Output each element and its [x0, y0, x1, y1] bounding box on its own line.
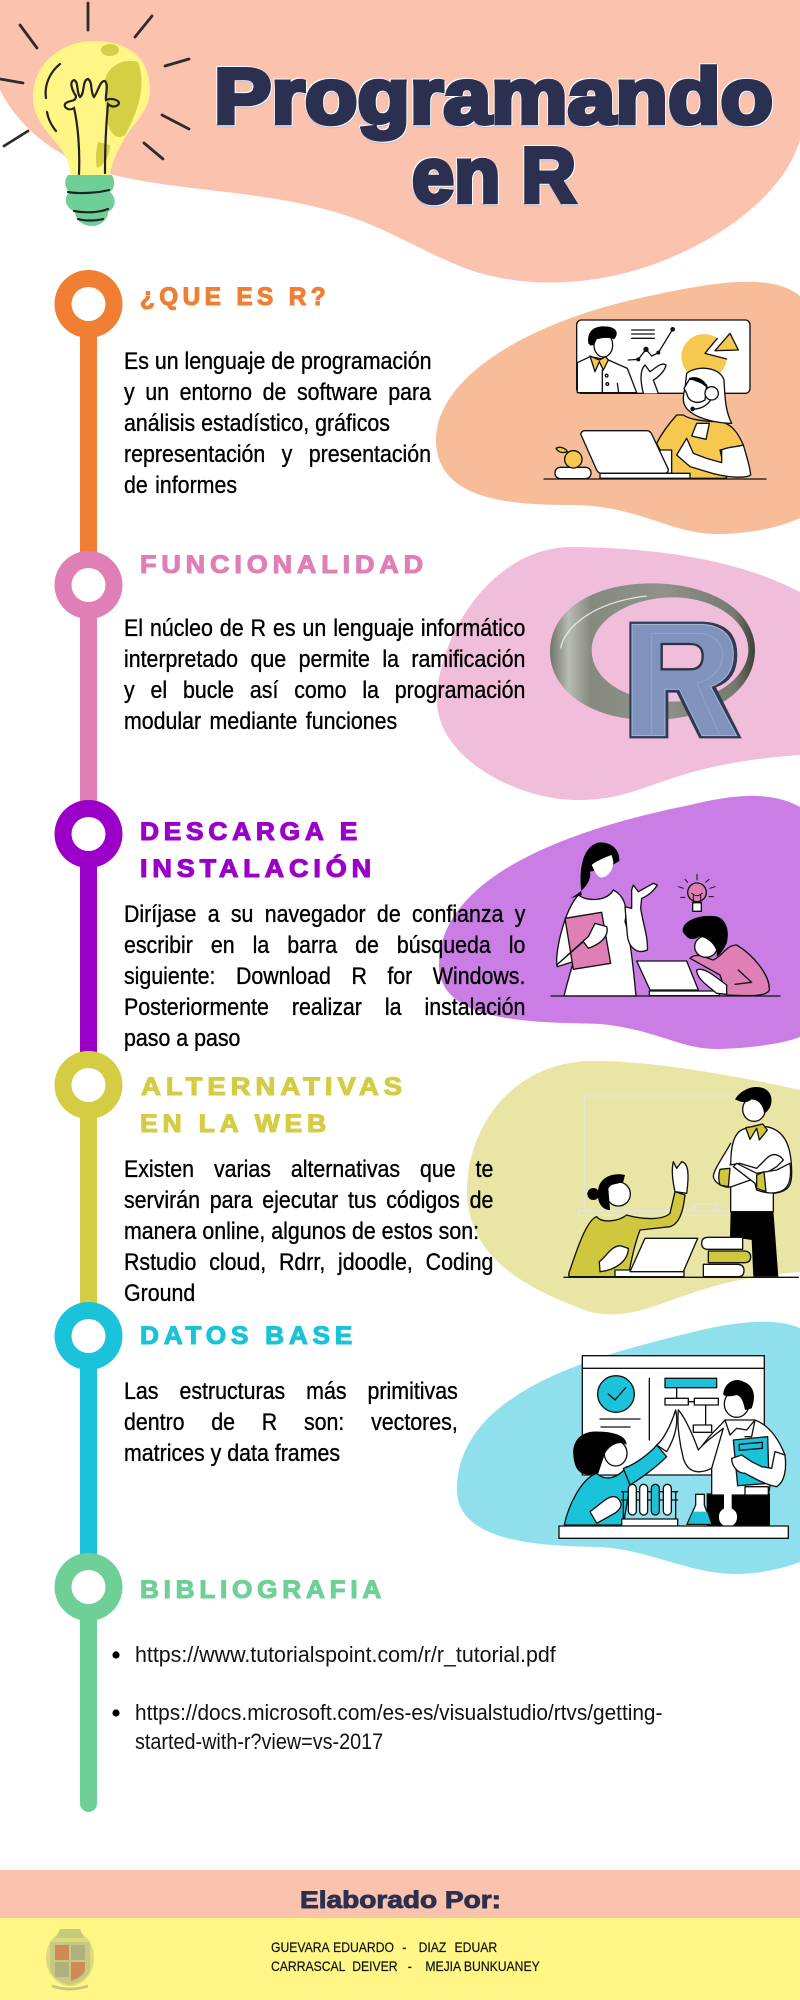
- text block: alternativas: servirán para ejecutar tus códigos de: [124, 1187, 493, 1214]
- blob: alternativas: [467, 1061, 800, 1314]
- title: Programando: [214, 52, 773, 140]
- footer heading: Elaborado Por:: [300, 1887, 501, 1914]
- heading: datos base: DATOS BASE: [140, 1322, 357, 1350]
- text block: funcionalidad: y el bucle así como la programación: [124, 677, 525, 704]
- bibliography links: https://www.tutorialspoint.com/r/r_tutorial.pdf: [135, 1642, 556, 1667]
- header blob: [0, 0, 800, 282]
- text block: descarga: Posteriormente realizar la instalación: [124, 994, 525, 1021]
- footer band: [0, 1870, 800, 2000]
- illustration: teacher and student: [551, 842, 780, 996]
- text block: descarga: escribir en la barra de búsqueda lo: [124, 932, 525, 959]
- text block: que es R: [124, 348, 432, 499]
- icon: university crest: [46, 1929, 94, 1989]
- heading: descarga e instalacion: [140, 818, 376, 883]
- text block: funcionalidad: [124, 615, 525, 735]
- footer names: CARRASCAL DEIVER - MEJIA BUNKUANEY: [271, 1958, 540, 1974]
- heading: alternativas en la web: EN LA WEB: [140, 1110, 331, 1138]
- illustration: classroom: [564, 1087, 798, 1277]
- blob: que es R: [436, 282, 800, 534]
- text block: funcionalidad: modular mediante funciones: [124, 708, 397, 735]
- illustration: video call: [544, 320, 766, 479]
- text block: funcionalidad: El núcleo de R es un lenguaje informático: [124, 615, 525, 642]
- text block: datos base: Las estructuras más primitivas: [124, 1378, 457, 1405]
- footer names: [271, 1939, 540, 1974]
- heading: descarga e instalacion: INSTALACIÓN: [140, 853, 376, 883]
- footer names: GUEVARA EDUARDO - DIAZ EDUAR: [271, 1939, 497, 1955]
- timeline: [54, 270, 122, 1812]
- title: [214, 52, 773, 219]
- bullets: [112, 1651, 120, 1717]
- blob: funcionalidad: [437, 547, 800, 800]
- heading: descarga e instalacion: DESCARGA E: [140, 818, 362, 846]
- heading: bibliografia: BIBLIOGRAFIA: [140, 1576, 386, 1604]
- text block: datos base: [124, 1378, 458, 1467]
- bibliography links: https://docs.microsoft.com/es-es/visualstudio/rtvs/getting-: [135, 1700, 662, 1725]
- text block: alternativas: Existen varias alternativas que te: [124, 1156, 493, 1183]
- text block: datos base: dentro de R son: vectores,: [124, 1409, 457, 1436]
- text block: que es R: Es un lenguaje de programación: [124, 348, 431, 375]
- title: en R: [412, 131, 576, 219]
- blob: datos base: [457, 1322, 800, 1574]
- icon: light bulb: [0, 3, 189, 226]
- text block: que es R: y un entorno de software para: [124, 379, 431, 406]
- blob: descarga: [439, 796, 800, 1049]
- heading: alternativas en la web: ALTERNATIVAS: [141, 1073, 407, 1101]
- heading: alternativas en la web: [140, 1073, 407, 1138]
- text block: alternativas: Ground: [124, 1280, 195, 1307]
- illustration: science lab: [559, 1356, 788, 1538]
- text block: descarga: siguiente: Download R for Windows.: [124, 963, 525, 990]
- bibliography links: started-with-r?view=vs-2017: [135, 1729, 383, 1754]
- text block: funcionalidad: interpretado que permite la ramificación: [124, 646, 525, 673]
- text block: alternativas: Rstudio cloud, Rdrr, jdoodle, Coding: [124, 1249, 493, 1276]
- text block: alternativas: manera online, algunos de estos son:: [124, 1218, 479, 1245]
- text block: descarga: paso a paso: [124, 1025, 240, 1052]
- illustration: R logo: [550, 583, 755, 738]
- heading: que es R: ¿QUE ES R?: [140, 283, 330, 311]
- heading: funcionalidad: FUNCIONALIDAD: [140, 551, 428, 579]
- text block: que es R: de informes: [124, 472, 237, 499]
- text block: que es R: representación y presentación: [124, 441, 431, 468]
- text block: datos base: matrices y data frames: [124, 1440, 340, 1467]
- text block: descarga: Diríjase a su navegador de confianza y: [124, 901, 525, 928]
- text block: que es R: análisis estadístico, gráficos: [124, 410, 389, 437]
- text block: alternativas: [124, 1156, 493, 1307]
- bibliography links: [135, 1642, 662, 1754]
- text block: descarga: [124, 901, 526, 1052]
